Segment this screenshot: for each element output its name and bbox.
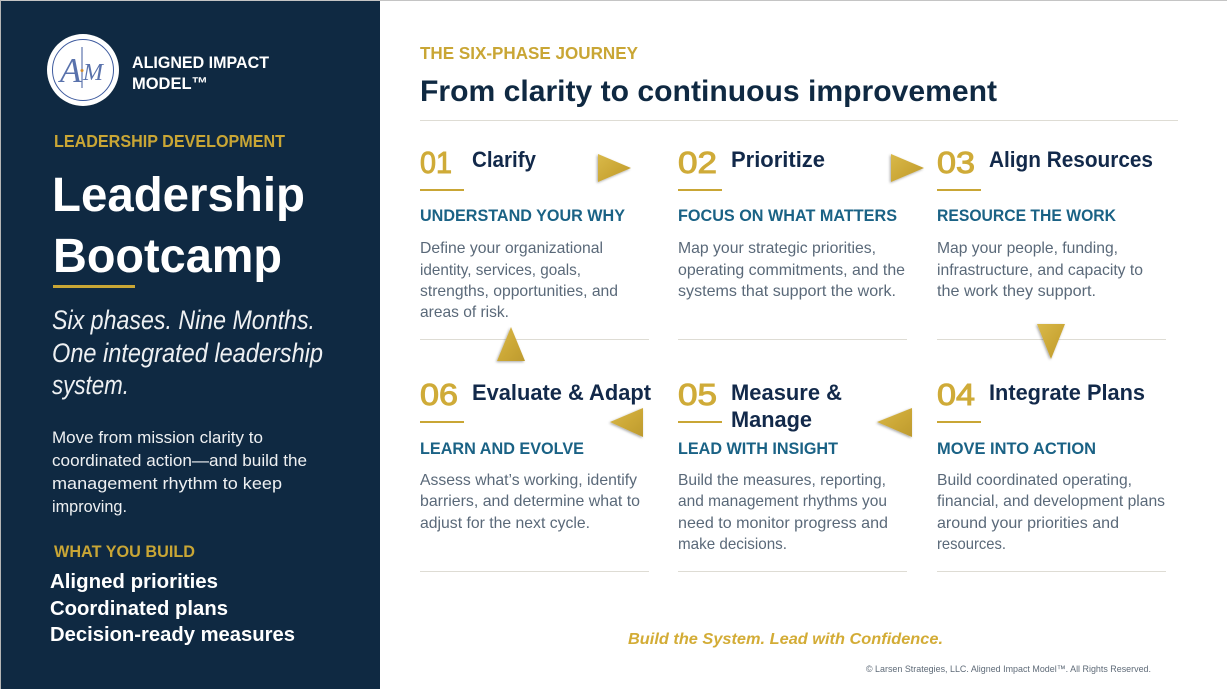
panel: phase 05 measure and manage <box>678 377 907 572</box>
tagline: six phases <box>52 305 323 400</box>
panel: phase 06 evaluate and adapt: adjust for the next cycle. <box>420 515 590 532</box>
panel: phase 05 measure and manage: 05 <box>678 377 717 412</box>
panel: phase 03 align resources: Map your people, funding, <box>937 240 1118 257</box>
panel: phase 03 align resources: RESOURCE THE WORK <box>937 206 1117 225</box>
panel: phase 01 clarify: Clarify <box>472 147 537 172</box>
panel: phase 04 integrate plans: resources. <box>937 536 1006 553</box>
panel: phase 05 measure and manage: make decisions. <box>678 536 787 553</box>
icon: AM monogram logo: M <box>82 60 105 86</box>
panel: phase 01 clarify: UNDERSTAND YOUR WHY <box>420 206 626 225</box>
logo wordmark: MODEL™ <box>132 74 208 93</box>
tagline: six phases: Six phases. Nine Months. <box>52 305 315 335</box>
panel: phase 03 align resources: infrastructure, and capacity to <box>937 262 1143 279</box>
copyright: © Larsen Strategies, LLC. Aligned Impact Model™. All Rights Reserved. <box>866 664 1151 675</box>
panel: phase 05 measure and manage: LEAD WITH INSIGHT <box>678 439 839 458</box>
arrow: 03 to 04 <box>1037 324 1065 359</box>
tagline: six phases: One integrated leadership <box>52 338 323 368</box>
panel: phase 01 clarify: Define your organizational <box>420 240 603 257</box>
tagline: six phases: system. <box>52 370 129 400</box>
logo wordmark: ALIGNED IMPACT <box>132 53 270 72</box>
panel: phase 03 align resources: 03 <box>937 145 975 180</box>
panel: phase 02 prioritize: 02 <box>678 145 717 180</box>
panel: phase 03 align resources: Align Resources <box>989 147 1153 172</box>
panel: phase 03 align resources <box>937 145 1166 340</box>
eyebrow: the six-phase journey: THE SIX-PHASE JOURNEY <box>420 43 638 63</box>
arrow: 05 to 06 <box>610 408 643 437</box>
panel: phase 02 prioritize: operating commitments, and the <box>678 262 905 279</box>
panel: phase 04 integrate plans: around your priorities and <box>937 515 1119 532</box>
subheading: what you build: WHAT YOU BUILD <box>54 543 195 561</box>
sidebar description: Move from mission clarity to <box>52 428 263 447</box>
panel: phase 04 integrate plans: Integrate Plans <box>989 380 1145 405</box>
list: outcomes: Aligned priorities <box>50 571 218 593</box>
sidebar description: management rhythm to keep <box>52 474 282 493</box>
heading underline <box>53 285 135 288</box>
sidebar description: improving. <box>52 497 127 516</box>
eyebrow: leadership development: LEADERSHIP DEVELOPMENT <box>54 131 285 151</box>
list: outcomes <box>50 571 295 646</box>
panel: phase 01 clarify: areas of risk. <box>420 304 509 321</box>
list: outcomes: Decision-ready measures <box>50 624 295 646</box>
panel: phase 02 prioritize: Prioritize <box>731 147 825 172</box>
panel: phase 06 evaluate and adapt <box>420 377 652 572</box>
panel: phase 06 evaluate and adapt: Assess what’s working, identify <box>420 472 637 489</box>
heading: Leadership Bootcamp: Leadership <box>52 169 305 222</box>
arrow: 02 to 03 <box>891 154 924 182</box>
icon: AM monogram logo: A <box>58 51 82 90</box>
panel: phase 04 integrate plans: financial, and development plans <box>937 493 1165 510</box>
heading: Leadership Bootcamp <box>52 169 305 283</box>
arrow: 06 to 01 <box>497 327 525 361</box>
sidebar description: coordinated action—and build the <box>52 451 307 470</box>
panel: phase 02 prioritize: Map your strategic priorities, <box>678 240 876 257</box>
panel: phase 05 measure and manage: Measure & <box>731 380 842 405</box>
logo wordmark <box>132 53 270 93</box>
panel: phase 02 prioritize: FOCUS ON WHAT MATTERS <box>678 206 897 225</box>
panel: phase 05 measure and manage: need to monitor progress and <box>678 515 888 532</box>
panel: phase 03 align resources: the work they support. <box>937 283 1096 300</box>
heading: Leadership Bootcamp: Bootcamp <box>53 230 282 283</box>
panel: phase 05 measure and manage: Build the measures, reporting, <box>678 472 886 489</box>
panel: phase 05 measure and manage: Manage <box>731 407 812 432</box>
arrow: 04 to 05 <box>877 408 912 437</box>
closing tagline: Build the System. Lead with Confidence. <box>628 631 943 648</box>
panel: phase 02 prioritize: systems that support the work. <box>678 283 896 300</box>
sidebar description <box>52 428 307 516</box>
panel: phase 04 integrate plans: 04 <box>937 377 975 412</box>
panel: phase 01 clarify: 01 <box>420 145 452 180</box>
main heading: From clarity to continuous improvement <box>420 75 997 108</box>
icon: AM monogram logo <box>47 34 119 106</box>
panel: phase 06 evaluate and adapt: Evaluate & Adapt <box>472 380 652 405</box>
panel: phase 01 clarify: strengths, opportunities, and <box>420 283 618 300</box>
panel: phase 04 integrate plans <box>937 377 1166 572</box>
panel: phase 04 integrate plans: MOVE INTO ACTION <box>937 439 1096 458</box>
arrow: 01 to 02 <box>598 154 631 182</box>
panel: phase 01 clarify <box>420 145 649 340</box>
panel: phase 06 evaluate and adapt: 06 <box>420 377 458 412</box>
list: outcomes: Coordinated plans <box>50 598 228 620</box>
panel: phase 06 evaluate and adapt: LEARN AND EVOLVE <box>420 439 584 458</box>
panel: phase 06 evaluate and adapt: barriers, and determine what to <box>420 493 640 510</box>
panel: phase 05 measure and manage: and management rhythms you <box>678 493 887 510</box>
panel: phase 04 integrate plans: Build coordinated operating, <box>937 472 1132 489</box>
panel: phase 02 prioritize <box>678 145 907 340</box>
panel: phase 01 clarify: identity, services, goals, <box>420 262 581 279</box>
panel: left sidebar <box>0 0 380 689</box>
